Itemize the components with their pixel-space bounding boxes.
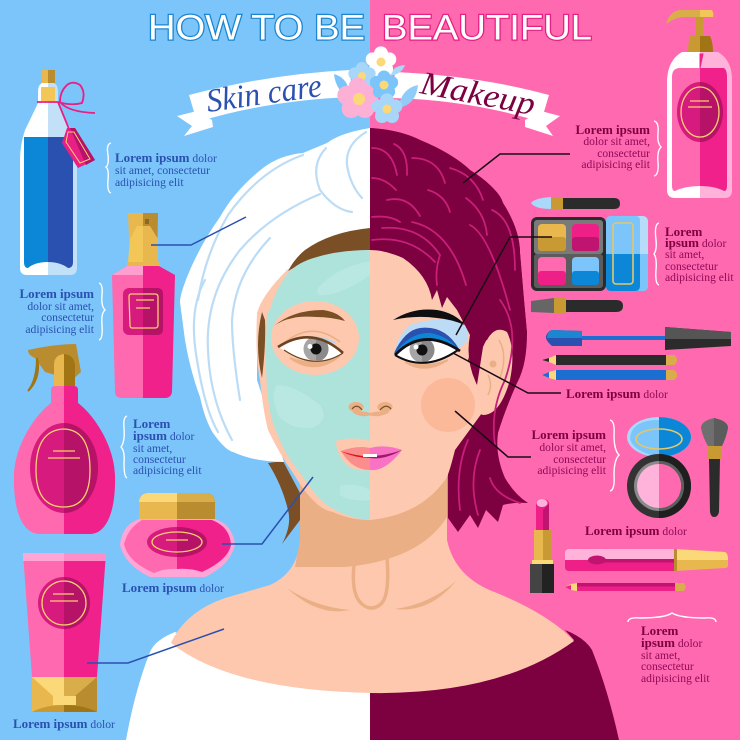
flower bouquet xyxy=(334,46,418,123)
text: left 2: dolor sit amet, xyxy=(27,300,94,313)
text: left 2: consectetur xyxy=(41,311,94,324)
text: left 1: Lorem ipsum xyxy=(115,150,190,165)
product: makeup brush xyxy=(531,298,623,313)
text: left 3: sit amet, xyxy=(133,442,172,455)
cleared eye area xyxy=(271,301,359,375)
lips xyxy=(340,446,402,470)
text: jar: dolor xyxy=(199,582,224,595)
maroon top xyxy=(370,630,619,740)
text: left 3: adipisicing elit xyxy=(133,464,202,477)
product: pump bottle xyxy=(666,10,732,198)
text: left 1: adipisicing elit xyxy=(115,176,184,189)
product: cream jar xyxy=(120,493,235,577)
front hair xyxy=(370,128,527,385)
brown hair lower strand xyxy=(268,461,300,544)
text: right 2: adipisicing elit xyxy=(665,271,734,284)
text: left 3: Lorem xyxy=(133,416,170,431)
hair strands xyxy=(372,144,520,515)
background: pink half xyxy=(370,0,740,740)
product: powder brush xyxy=(701,418,728,517)
ribbon: makeup xyxy=(392,65,560,136)
text: compact: Lorem ipsum xyxy=(585,523,660,538)
leader line: hair to pump xyxy=(463,154,570,183)
text: right 4: Lorem xyxy=(641,623,678,638)
text: right 3: adipisicing elit xyxy=(537,464,607,477)
cleared mouth area xyxy=(336,438,370,470)
brace: left 2 xyxy=(99,283,105,340)
product: lip gloss xyxy=(565,549,728,571)
text: right 2: Lorem xyxy=(665,224,702,239)
text: right 3: Lorem ipsum xyxy=(531,427,606,442)
product: lip pencil xyxy=(565,583,686,591)
face skin left xyxy=(256,250,370,520)
ribbon label: Skin care: Skin care xyxy=(204,68,324,120)
face mask xyxy=(266,250,370,520)
towel xyxy=(180,128,370,462)
text: mascara: Lorem ipsum xyxy=(566,386,641,401)
product: trigger spray xyxy=(14,344,115,534)
product: spray bottle xyxy=(112,213,175,398)
text: tube: Lorem ipsum xyxy=(13,716,88,731)
text: left 2: adipisicing elit xyxy=(25,323,95,336)
face skin right xyxy=(370,250,482,520)
text: right 2: dolor xyxy=(702,237,726,250)
perfume tag and ribbon xyxy=(37,83,95,168)
brace: right 1 xyxy=(654,121,661,176)
brace: right 4 xyxy=(628,613,716,622)
title xyxy=(148,8,592,48)
product: mascara xyxy=(546,327,731,350)
nose xyxy=(348,402,392,416)
ribbon: skin care xyxy=(177,68,352,136)
text: compact: dolor xyxy=(662,525,687,538)
blush cheek xyxy=(421,378,475,432)
leader line: jar to mask xyxy=(222,477,313,544)
text: mascara: dolor xyxy=(643,388,668,401)
ribbon label: Makeup: Makeup xyxy=(416,65,538,123)
white top xyxy=(126,632,370,740)
product: eyeshadow palette xyxy=(531,216,648,291)
leader line: spray to towel xyxy=(151,217,246,245)
text: left 3: dolor xyxy=(170,430,194,443)
text: right 1: adipisicing elit xyxy=(581,158,651,171)
text: right 2: ipsum xyxy=(665,235,699,250)
text: right 4: consectetur xyxy=(641,660,694,673)
text: left 3: ipsum xyxy=(133,428,167,443)
leader line: tube to shoulder xyxy=(87,629,224,663)
product: eye pencils xyxy=(542,355,677,380)
text: right 1: Lorem ipsum xyxy=(575,122,650,137)
background: blue half xyxy=(0,0,370,740)
product: sponge applicator xyxy=(531,197,620,209)
portrait figure xyxy=(126,128,619,740)
text: left 2: Lorem ipsum xyxy=(19,286,94,301)
text: right 4: sit amet, xyxy=(641,649,680,662)
brace: right 2 xyxy=(654,223,659,285)
text: right 3: dolor sit amet, xyxy=(539,441,606,454)
right eye makeup xyxy=(393,309,468,368)
text: jar: Lorem ipsum xyxy=(122,580,197,595)
text: right 2: consectetur xyxy=(665,260,718,273)
left eye natural xyxy=(274,310,345,367)
shoulders and neck xyxy=(171,480,574,693)
text: right 2: sit amet, xyxy=(665,248,704,261)
leader line: cheek to blush xyxy=(455,411,531,457)
brace: left 1 xyxy=(106,143,111,193)
leader line: eye to mascara xyxy=(453,353,561,393)
neck and collarbone lines xyxy=(287,558,456,611)
product: perfume bottle with tag xyxy=(20,70,95,275)
text: right 4: adipisicing elit xyxy=(641,672,710,685)
towel folds xyxy=(194,132,366,440)
brown hair line top xyxy=(288,228,370,271)
text: right 4: ipsum xyxy=(641,635,675,650)
mask highlights xyxy=(274,261,370,500)
product: tube xyxy=(23,553,106,712)
text: left 1: dolor xyxy=(192,152,217,165)
text: left 3: consectetur xyxy=(133,453,186,466)
brace: right 3 xyxy=(610,420,619,491)
text: left 1: sit amet, consectetur xyxy=(115,164,210,177)
text: right 1: consectetur xyxy=(597,147,650,160)
text: right 1: dolor sit amet, xyxy=(583,135,650,148)
text: tube: dolor xyxy=(90,718,115,731)
brace: left 3 xyxy=(121,416,127,478)
product: lipstick xyxy=(530,499,554,593)
ear xyxy=(468,330,512,415)
title: BEAUTIFUL xyxy=(382,8,592,48)
title: HOW TO BE xyxy=(148,8,365,48)
text: right 3: consectetur xyxy=(553,453,606,466)
text: right 4: dolor xyxy=(678,637,702,650)
back hair right xyxy=(370,128,528,532)
leader line: eyeshadow to palette xyxy=(456,237,552,335)
brown hair side strip xyxy=(258,312,265,378)
product: powder compact xyxy=(627,417,691,518)
neck shadow xyxy=(295,470,447,567)
